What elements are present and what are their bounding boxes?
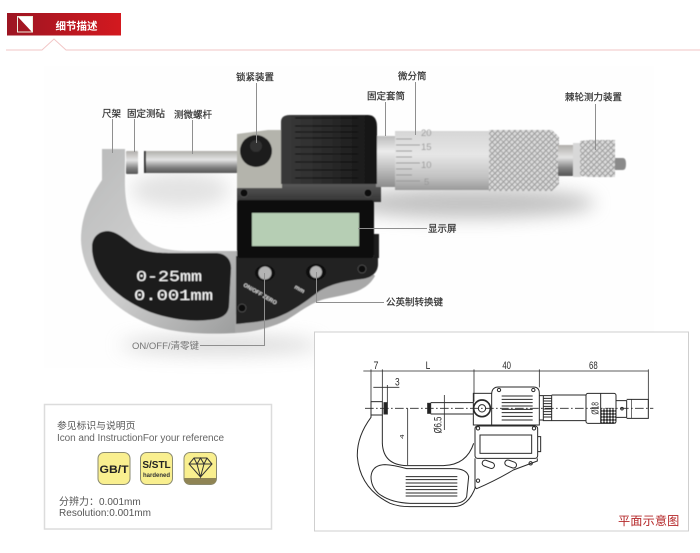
leader lines (112, 82, 596, 346)
icon: S/STL hardened (140, 452, 172, 484)
soft shadow beneath micrometer (120, 172, 595, 354)
illustration: digital micrometer (81, 115, 626, 334)
dimension values: L (426, 360, 430, 372)
lock knob (240, 135, 272, 167)
icon: S/STL hardened: S/STL (142, 460, 171, 471)
center line (365, 407, 653, 410)
dimension values: Ø18 (591, 402, 602, 415)
label: display: 显示屏 (428, 224, 457, 235)
thimble scale numbers: 15 (421, 142, 432, 153)
label: thimble: 微分筒 (398, 70, 427, 82)
display (475, 426, 538, 458)
label: sleeve: 固定套筒 (367, 90, 405, 102)
card title chinese: 参见标识与说明页 (57, 419, 136, 432)
dimension values: 40 (502, 360, 511, 372)
resolution chinese: 分辨力：0.001mm (59, 495, 141, 508)
function buttons (255, 264, 326, 281)
button caption mm: mm (293, 285, 305, 295)
icon: GB/T (98, 452, 130, 484)
knurled grip (489, 130, 559, 191)
dimension values (373, 360, 602, 439)
label: lock: 锁紧装置 (236, 72, 274, 84)
label: frame: 尺架 (102, 109, 122, 120)
black electronics body (236, 256, 378, 324)
button plate (475, 458, 537, 489)
technical drawing (357, 360, 653, 507)
callout labels (102, 70, 622, 352)
thimble (539, 395, 586, 421)
grip printed range: 0-25mm (136, 269, 202, 286)
thimble scale numbers: 20 (421, 128, 432, 139)
dimension values: 68 (589, 360, 598, 372)
panel: photo background (44, 66, 654, 368)
icon: S/STL hardened: hardened (143, 473, 170, 479)
upper neck of body (237, 183, 381, 202)
frame outline (357, 415, 476, 507)
card title english: Icon and InstructionFor your reference (57, 433, 224, 444)
micrometer frame (81, 149, 237, 334)
label: unit switch: 公英制转换键 (386, 296, 444, 308)
black grip pad (92, 231, 231, 321)
spindle (431, 403, 473, 414)
thimble scale numbers: 10 (421, 160, 432, 171)
label: anvil: 固定测砧 (127, 108, 166, 120)
end cap (615, 158, 626, 170)
heading: detail description: 细节描述 (56, 20, 98, 32)
anvil block top (371, 402, 382, 415)
ratchet knurl (580, 140, 615, 177)
dimension values: Ø6.5 (432, 417, 444, 433)
label: ratchet: 棘轮测力装置 (565, 92, 622, 104)
icon: diamond hardness (184, 452, 216, 484)
screws (238, 189, 372, 312)
anvil (384, 403, 387, 414)
collar (558, 145, 573, 176)
panel: icon and instruction card (44, 404, 272, 529)
dimension values: 3 (395, 377, 400, 389)
thimble scale numbers: 5 (424, 177, 429, 188)
caption: plan view: 平面示意图 (618, 513, 679, 528)
display bezel (237, 200, 374, 258)
LCD screen (252, 213, 359, 246)
thimble scale ticks (396, 139, 420, 181)
grip printed resolution: 0.001mm (134, 288, 213, 305)
icon: GB/T: GB/T (100, 464, 129, 476)
sleeve (376, 136, 398, 187)
body lines (502, 396, 533, 420)
grip pad (371, 465, 469, 503)
dimension values: 4 (400, 434, 406, 439)
knurl section (586, 393, 616, 423)
header divider with notch (6, 39, 700, 50)
grip ridges (295, 118, 358, 178)
buttons (481, 459, 495, 469)
fixed anvil (126, 151, 138, 174)
ratchet end (616, 399, 648, 418)
lock block and body (473, 393, 492, 425)
resolution english: Resolution:0.001mm (59, 508, 151, 519)
thimble (395, 131, 490, 190)
label: on off: ON/OFF/清零键 (132, 340, 200, 352)
body screws (476, 388, 536, 482)
lock block (237, 130, 282, 188)
dimension values: 7 (373, 360, 378, 372)
icon: banner square (18, 16, 32, 32)
thimble scale numbers (421, 128, 432, 188)
panel: plan schematic (314, 332, 688, 531)
dimension lines (363, 369, 648, 465)
spindle (144, 151, 238, 173)
label: spindle: 测微螺杆 (174, 109, 213, 121)
button caption ON/OFF ZERO: ON/OFF ZERO (242, 283, 278, 307)
section header banner (7, 13, 121, 36)
pad lines (406, 477, 457, 496)
silver lower lip (235, 270, 375, 333)
black locking body (281, 115, 377, 184)
